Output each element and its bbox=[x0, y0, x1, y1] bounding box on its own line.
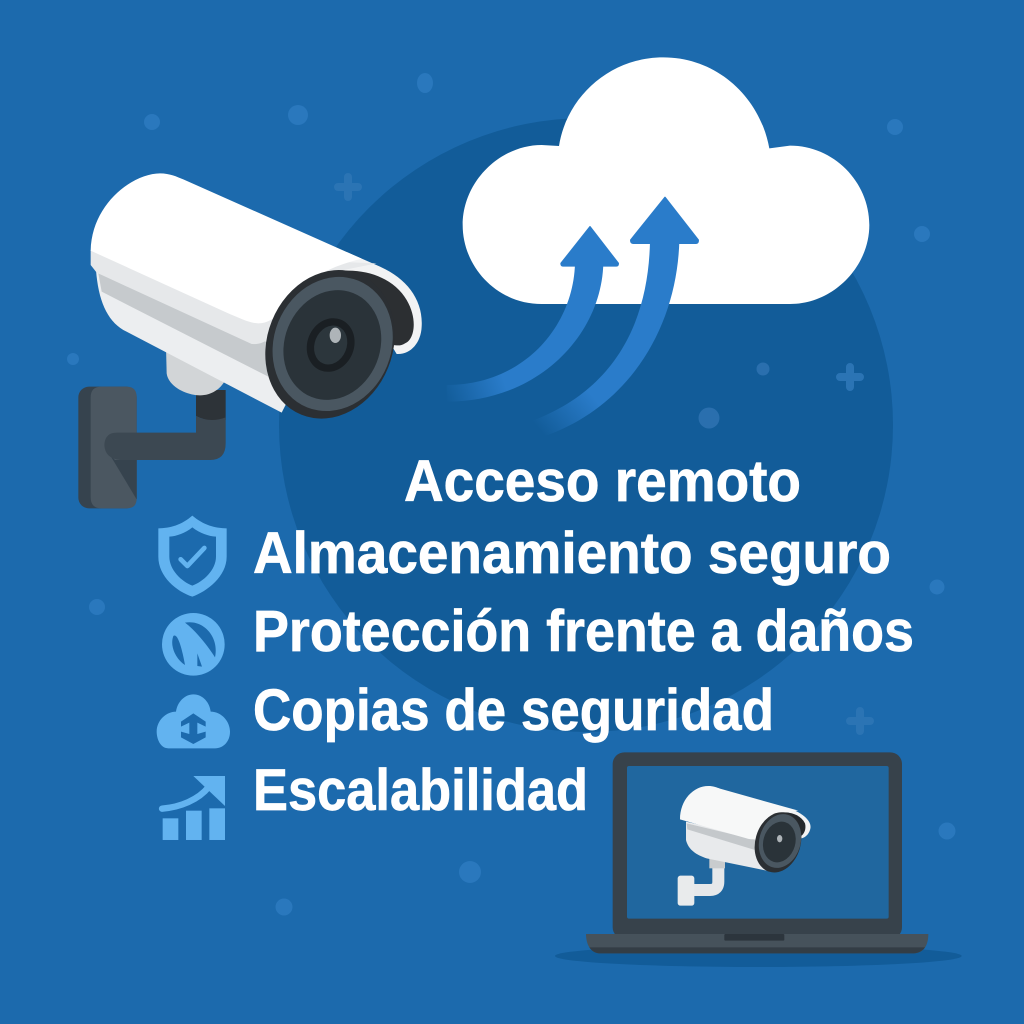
light band bbox=[91, 250, 377, 344]
list item: Escalabilidad: Escalabilidad bbox=[253, 758, 588, 823]
icon: growth chart bbox=[162, 776, 225, 840]
laptop base bbox=[586, 934, 928, 953]
arrow left bbox=[447, 227, 618, 402]
camera hood outer bbox=[293, 252, 422, 354]
decorative dots and plus signs bbox=[67, 73, 956, 916]
wall plate bbox=[78, 387, 137, 508]
camera top shell bbox=[91, 173, 362, 323]
laptop shadow bbox=[555, 945, 962, 967]
lens bbox=[243, 250, 417, 438]
list icons bbox=[157, 516, 230, 840]
laptop lid bbox=[613, 752, 902, 939]
grey stripe bbox=[98, 273, 270, 377]
icon: shield with check bbox=[158, 516, 227, 597]
list item: Almacenamiento seguro: Almacenamiento seguro bbox=[253, 521, 891, 586]
mount neck bbox=[166, 347, 227, 395]
mini lens bbox=[748, 807, 808, 878]
mini camera bbox=[678, 786, 811, 906]
icon: cloud backup bbox=[157, 694, 230, 748]
laptop screen bbox=[627, 766, 889, 919]
heading: Acceso remoto: Acceso remoto bbox=[404, 449, 801, 514]
cloud with upload arrows bbox=[447, 57, 869, 437]
list item: Protección frente a daños: Protección frente a daños bbox=[253, 599, 914, 664]
security camera on wall mount bbox=[78, 173, 422, 508]
camera lower body bbox=[96, 270, 300, 413]
cloud bbox=[463, 57, 869, 304]
laptop showing camera bbox=[555, 752, 962, 967]
arrow right bbox=[530, 197, 698, 437]
mini mount bbox=[678, 857, 725, 906]
list item: Copias de seguridad: Copias de seguridad bbox=[253, 678, 774, 743]
background circle bbox=[279, 118, 893, 732]
hood interior bbox=[327, 271, 414, 345]
icon: damage protection bbox=[162, 613, 225, 676]
mini body bbox=[680, 786, 811, 871]
mount arm bbox=[104, 390, 226, 460]
